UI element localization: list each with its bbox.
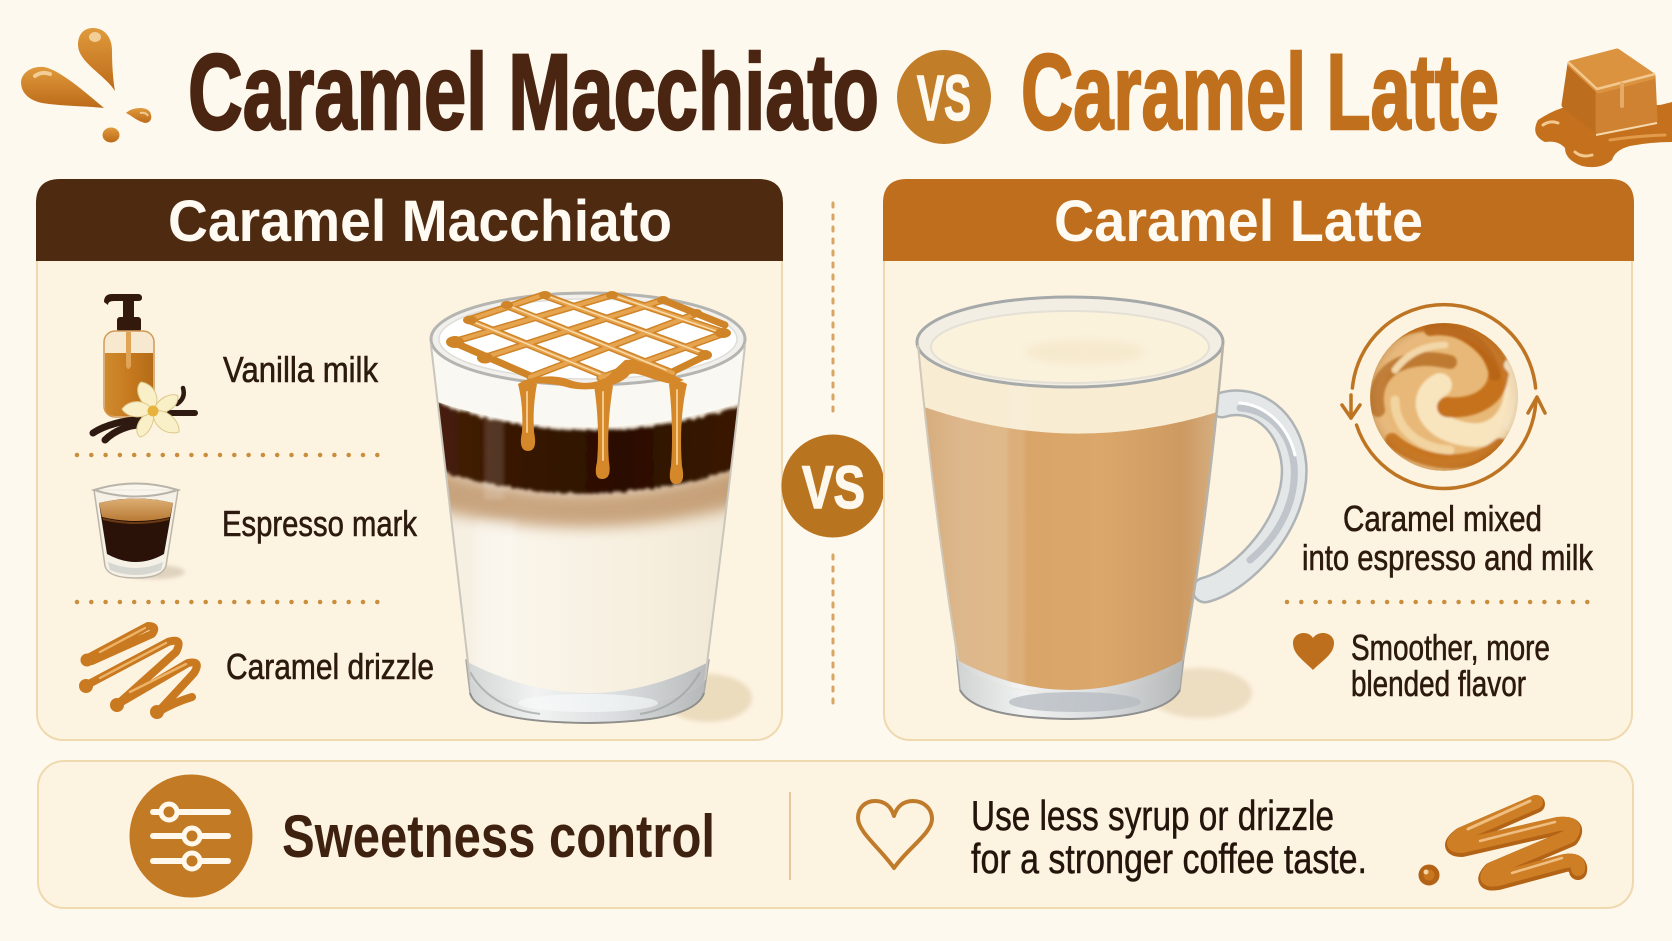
bar background [38, 761, 1633, 908]
mug handle [1205, 403, 1295, 590]
heading: Sweetness control: Sweetness control [282, 803, 715, 870]
text: tip [971, 792, 1367, 882]
text: tip: Use less syrup or drizzle [971, 792, 1334, 839]
swirl arrows [1342, 305, 1545, 488]
text: tip: for a stronger coffee taste. [971, 835, 1367, 882]
coffee and foam [920, 352, 1221, 694]
panel body [37, 200, 782, 740]
label: Caramel drizzle: Caramel drizzle [226, 646, 434, 687]
glass base [466, 660, 709, 723]
swirl ball [1370, 322, 1519, 471]
icon: sliders [130, 774, 252, 898]
badge: vs [897, 50, 991, 144]
caramel drips [518, 360, 687, 484]
mug shadow [1148, 668, 1252, 718]
divider [789, 792, 791, 880]
mug edges [918, 345, 958, 660]
label: Espresso mark: Espresso mark [222, 503, 418, 544]
panel header bar [36, 179, 783, 261]
panel heading: Caramel Latte [1054, 189, 1423, 254]
text: flavor note [1351, 627, 1550, 704]
panel: sweetness control [38, 761, 1633, 908]
dotted row [77, 453, 381, 457]
dotted line top [832, 203, 834, 417]
text: mix description [1302, 498, 1594, 578]
illustration: latte mug [910, 297, 1295, 719]
panel: caramel latte [883, 179, 1634, 740]
icon: solid heart [1293, 633, 1334, 670]
text: mix description: Caramel mixed [1343, 498, 1542, 539]
icon: caramel swirl [1342, 305, 1545, 488]
caramel lattice [453, 295, 725, 378]
icon: outline heart [858, 801, 932, 868]
dotted row [1287, 600, 1597, 604]
panel body [884, 200, 1632, 740]
title: Caramel Macchiato: Caramel Macchiato [188, 31, 879, 152]
panel header bar [883, 179, 1634, 261]
dotted line bottom [832, 555, 834, 703]
icon: caramel drizzle [79, 626, 197, 719]
center divider [782, 203, 884, 703]
text: flavor note: Smoother, more [1351, 627, 1550, 668]
panel: caramel macchiato [36, 179, 783, 740]
glass edge [431, 345, 470, 680]
glass shadow [664, 674, 752, 722]
icon: caramel squiggle [1421, 801, 1578, 883]
milk surface [931, 311, 1209, 383]
badge: VS [782, 434, 884, 538]
panel heading: Caramel Macchiato [168, 189, 672, 254]
icon: caramel cube [1535, 52, 1672, 167]
drink layers [432, 349, 744, 701]
icon: espresso glass [94, 484, 185, 579]
badge: vs: VS [917, 62, 971, 134]
icon: vanilla bottle [93, 294, 195, 440]
text: mix description: into espresso and milk [1302, 537, 1594, 578]
mug rim [917, 297, 1223, 387]
mug base [955, 640, 1186, 719]
icon: caramel splash [21, 28, 151, 142]
header [21, 28, 1672, 167]
badge: VS: VS [802, 454, 865, 521]
text: flavor note: blended flavor [1351, 663, 1526, 704]
label: Vanilla milk: Vanilla milk [223, 349, 379, 390]
glass rim [431, 293, 745, 385]
dotted row [77, 600, 381, 604]
illustration: macchiato glass [420, 291, 760, 725]
